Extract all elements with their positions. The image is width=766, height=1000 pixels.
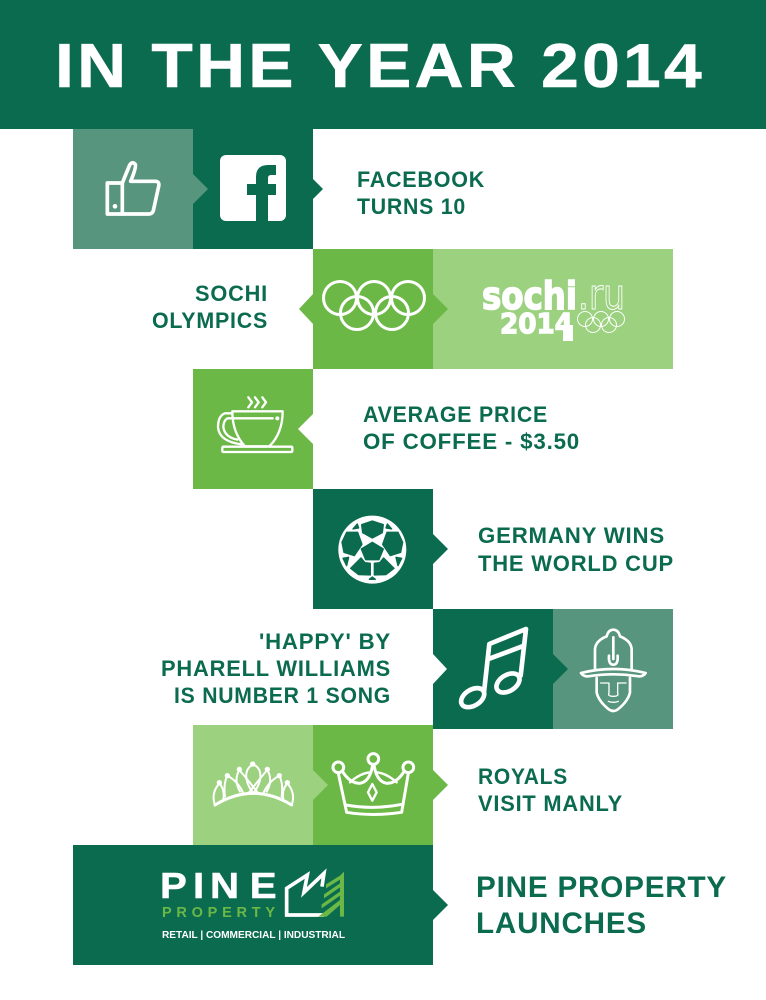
text: sochi olympics: SOCHI (195, 281, 268, 306)
logo: pine property: RETAIL | COMMERCIAL | INDUSTRIAL (162, 930, 345, 941)
text: facebook: TURNS 10 (357, 194, 466, 219)
text: happy: IS NUMBER 1 SONG (174, 683, 391, 708)
text: world cup: GERMANY WINS (478, 523, 665, 548)
text: coffee: AVERAGE PRICE (363, 402, 548, 427)
text: happy (161, 629, 391, 708)
text: royals (478, 764, 623, 816)
panel: sochi olympics (299, 249, 673, 369)
panel: royals (193, 725, 448, 845)
text: facebook (357, 167, 485, 219)
icon: tiara (214, 762, 293, 805)
icon: crown (333, 754, 414, 814)
text: world cup: THE WORLD CUP (478, 551, 674, 576)
icon: soccer ball (338, 516, 406, 584)
title banner: IN THE YEAR 2014 (55, 32, 705, 101)
text: pine property launches: PINE PROPERTY (476, 871, 727, 904)
panel: pine property (73, 845, 448, 965)
text: facebook: FACEBOOK (357, 167, 485, 192)
icon: facebook logo (220, 155, 286, 221)
text: coffee (363, 402, 580, 454)
panel: happy (433, 609, 673, 729)
icon: sochi 2014 logo: sochi (482, 274, 577, 318)
text: royals: ROYALS (478, 764, 568, 789)
logo: pine property: PROPERTY (162, 905, 275, 921)
panel: facebook (73, 129, 323, 249)
text: sochi olympics: OLYMPICS (152, 308, 268, 333)
icon: sochi 2014 logo: .ru (578, 270, 625, 319)
text: happy: 'HAPPY' BY (259, 629, 391, 654)
icon: sochi 2014 logo: 2014 (500, 307, 573, 340)
text: pine property launches (476, 871, 727, 940)
panel: coffee (193, 369, 313, 489)
text: world cup (478, 523, 674, 576)
text: sochi olympics (152, 281, 268, 333)
icon: olympic rings (324, 282, 424, 330)
icon: factory house (287, 872, 344, 917)
icon: thumbs up (107, 163, 159, 214)
text: royals: VISIT MANLY (478, 791, 623, 816)
text: pine property launches: LAUNCHES (476, 907, 647, 940)
text: happy: PHARELL WILLIAMS (161, 656, 391, 681)
title banner (0, 0, 766, 129)
icon: music notes (458, 629, 526, 711)
icon: sochi 2014 logo (482, 270, 625, 341)
logo: pine property: PINE (160, 866, 277, 906)
icon: coffee cup (218, 397, 292, 452)
icon: man in hat (581, 630, 646, 711)
text: coffee: OF COFFEE - $3.50 (363, 429, 580, 454)
logo: pine property (160, 866, 345, 941)
panel: world cup (313, 489, 448, 609)
